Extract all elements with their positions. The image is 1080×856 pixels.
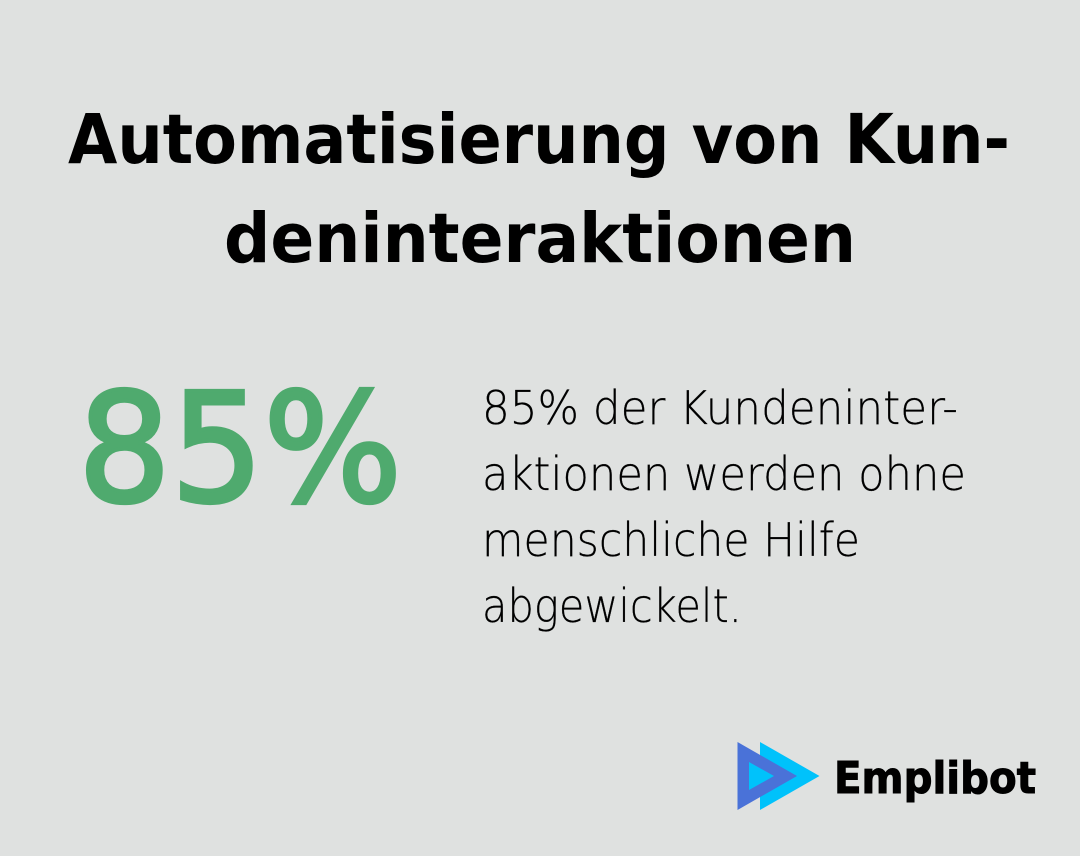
title: Automatisierung von Kun- [68,100,1010,180]
description text [482,381,966,633]
wordmark: Emplibot [834,753,1036,804]
title [68,100,1010,279]
icon: play triangles [738,742,820,810]
description text: 85% der Kundeninter- [482,381,958,435]
big stat: 85%: 85% [78,361,402,537]
title: deninteraktionen [224,199,856,279]
description text: menschliche Hilfe [482,513,860,567]
description text: aktionen werden ohne [482,447,966,501]
logo: Emplibot [738,742,1036,810]
description text: abgewickelt. [482,579,742,633]
